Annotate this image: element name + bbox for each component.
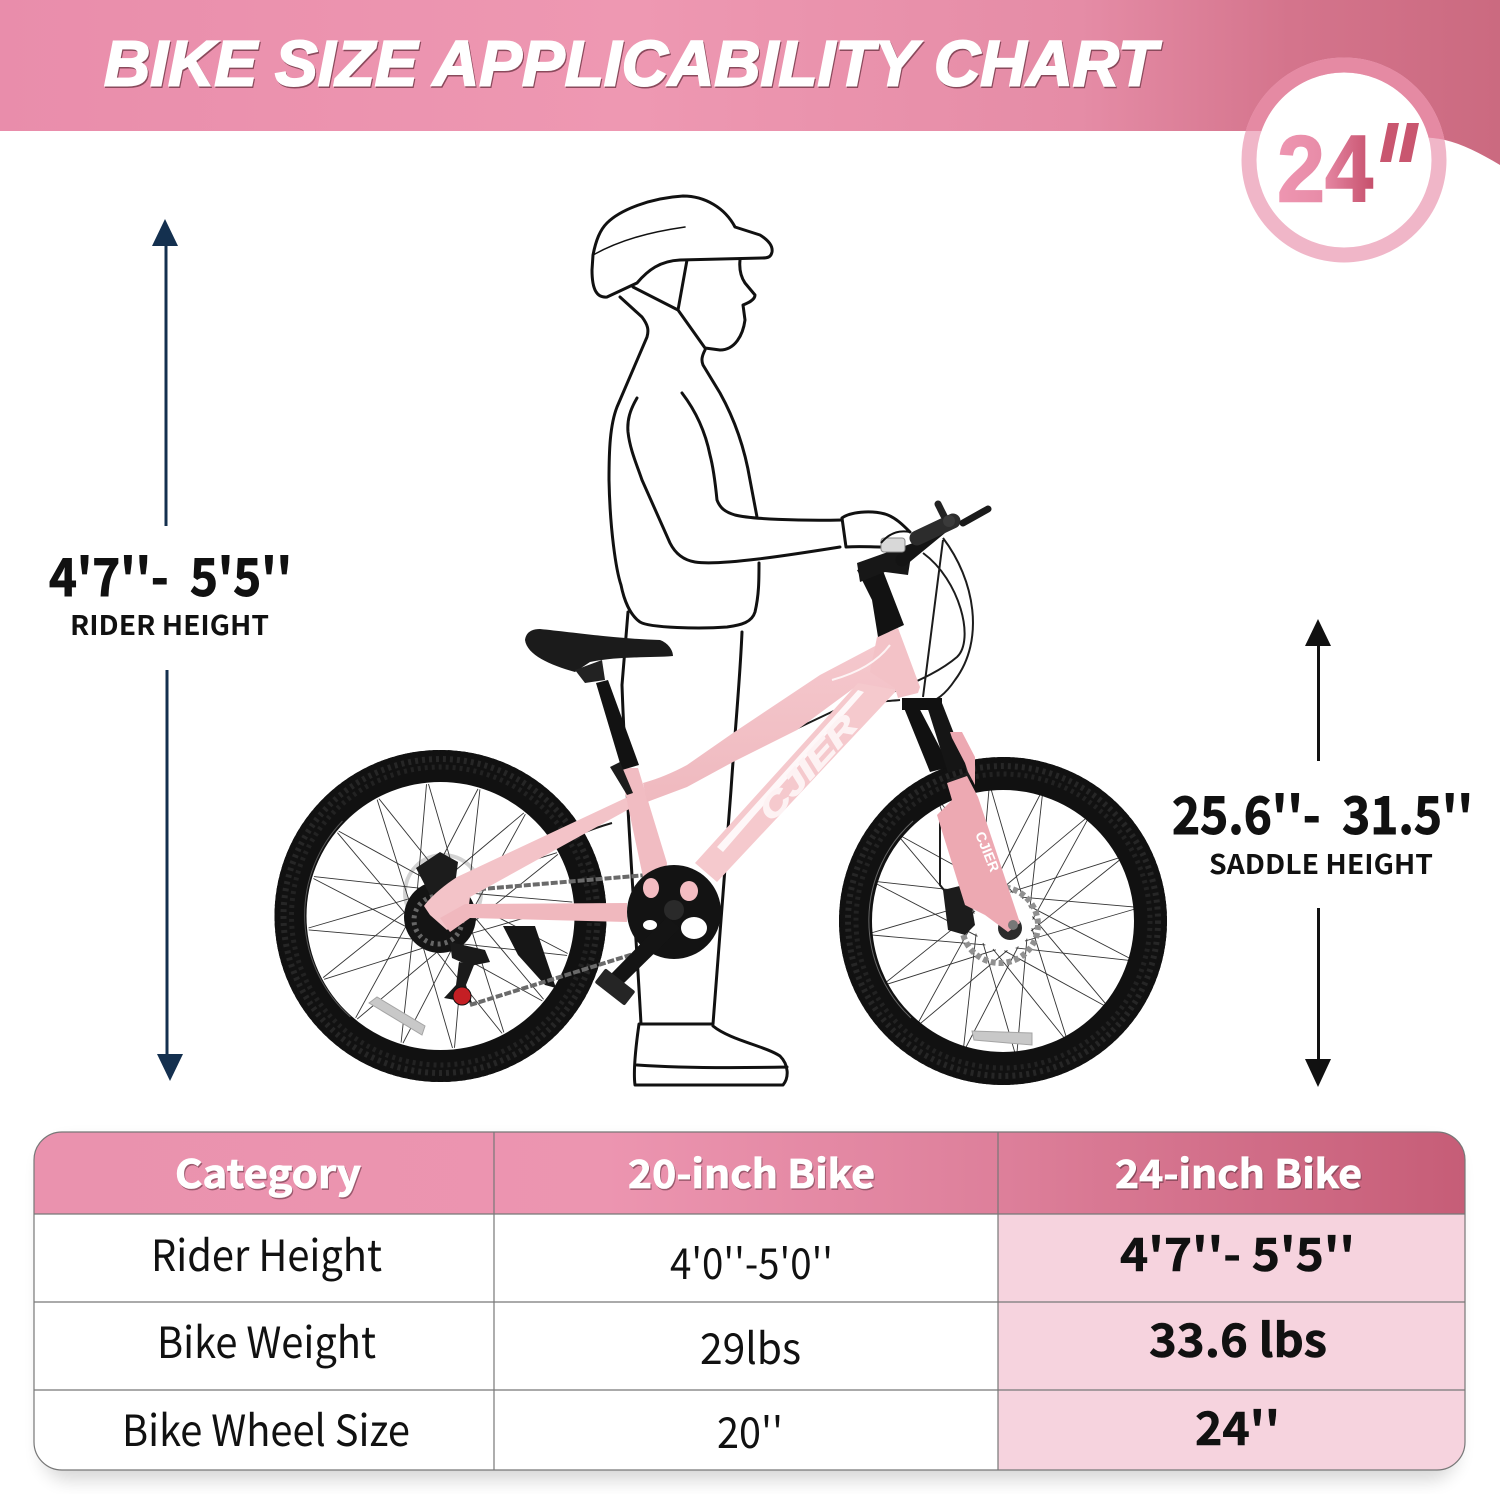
hand <box>842 512 910 547</box>
trousers <box>622 612 742 1024</box>
fork logo: CJIER <box>972 829 1003 874</box>
rear disc rotor <box>405 855 481 931</box>
arrow: rider height <box>152 219 183 1081</box>
24-inch values: 4'7''- 5'5'' <box>1120 1219 1355 1285</box>
front wheel <box>841 759 1165 1083</box>
label: rider height <box>49 536 292 643</box>
head and face <box>633 260 755 350</box>
size badge: 24 inch <box>1249 65 1439 255</box>
table header row: 20-inch Bike <box>628 1144 875 1200</box>
label: saddle height <box>1172 774 1473 882</box>
row labels: Bike Weight <box>157 1309 376 1371</box>
steerer and stem <box>857 563 904 637</box>
table header row: Category <box>176 1146 362 1202</box>
helmet <box>592 196 772 297</box>
table header row: Category <box>175 1144 361 1200</box>
size comparison table <box>34 1132 1465 1480</box>
crankset <box>594 865 721 1006</box>
jacket and arm <box>609 297 842 628</box>
fork axle <box>1008 920 1018 930</box>
row labels: Rider Height <box>151 1222 382 1284</box>
20-inch values <box>670 1230 833 1461</box>
20-inch values: 29lbs <box>700 1315 801 1377</box>
cables <box>483 538 973 895</box>
header banner <box>0 0 1500 165</box>
saddle <box>525 629 673 672</box>
24-inch values: 33.6 lbs <box>1149 1305 1327 1371</box>
seat post <box>596 680 639 770</box>
table header row <box>175 1144 1363 1202</box>
bicycle <box>276 504 1165 1083</box>
reflectors <box>369 997 1032 1045</box>
helmet seam <box>593 227 685 255</box>
table cells <box>34 1132 1465 1470</box>
table shadow <box>42 1142 1457 1480</box>
20-inch values: 20'' <box>717 1399 783 1461</box>
table header row: 24-inch Bike <box>1116 1146 1363 1202</box>
row labels: Bike Wheel Size <box>122 1397 410 1459</box>
label: rider height: RIDER HEIGHT <box>70 604 269 643</box>
24-inch values: 24'' <box>1195 1393 1280 1459</box>
label: rider height: 4'7''- 5'5'' <box>49 536 292 611</box>
table header row: 24-inch Bike <box>1115 1144 1362 1200</box>
frame tubes <box>620 768 667 897</box>
shoe <box>634 1024 787 1085</box>
label: saddle height: 25.6''- 31.5'' <box>1172 774 1473 849</box>
20-inch values: 4'0''-5'0'' <box>670 1230 833 1292</box>
table grid lines <box>34 1132 1465 1470</box>
arrow: saddle height <box>1305 619 1331 1087</box>
rear sprockets and derailleur <box>404 852 556 1005</box>
frame logo: CJIER <box>753 709 865 828</box>
suspension fork <box>902 702 950 772</box>
title: BIKE SIZE APPLICABILITY CHART <box>104 28 1162 100</box>
title: BIKE SIZE APPLICABILITY CHART <box>105 29 1163 101</box>
front disc brake <box>943 884 1038 963</box>
chain <box>470 875 647 1005</box>
size badge: 24 inch: 24 <box>1277 116 1373 222</box>
row labels <box>122 1222 410 1459</box>
seat stay and chain stay <box>424 795 632 930</box>
24-inch values <box>1120 1219 1355 1459</box>
label: saddle height: SADDLE HEIGHT <box>1209 843 1433 882</box>
handlebar, grip and bell <box>881 504 988 560</box>
rider outline figure <box>592 196 910 1085</box>
rear wheel <box>276 752 604 1080</box>
table header row: 20-inch Bike <box>629 1146 876 1202</box>
